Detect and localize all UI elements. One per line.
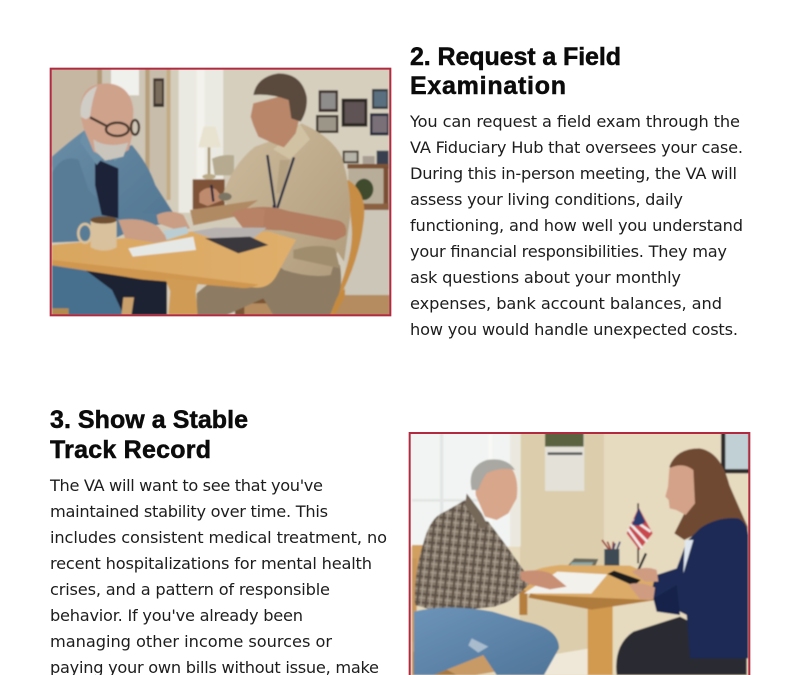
checkbook and papers [128,237,196,257]
chair [411,648,495,675]
tablet, pen and hands [607,571,641,586]
section 2: body text [409,112,743,339]
section 3: body text: includes consistent medical treatment, no [50,528,387,547]
section 2: body text: VA Fiduciary Hub that oversees your case. [410,138,743,157]
pen, clipboard, papers [211,185,213,202]
right man's trousers [196,264,342,314]
flag [627,503,653,563]
section 2: heading: 2. Request a Field [410,43,621,71]
table [52,232,296,288]
section 2: body text: functioning, and how well you understand [410,216,743,235]
section 3: heading: 3. Show a Stable [50,406,248,434]
section 3: body text: recent hospitalizations for mental health [50,554,372,573]
section 2: body text: your financial responsibilities. They may [410,242,727,261]
mug [78,224,92,243]
left man's head [80,83,133,160]
woman's blazer [652,518,748,658]
section 3: body text: The VA will want to see that you've [49,476,323,495]
section 3: body text: managing other income sources or [50,632,332,651]
section 3: body text [49,476,387,675]
section 2: body text: assess your living conditions, daily [410,190,683,209]
section 2: body text: expenses, bank account balances, and [410,294,722,313]
man's hand [521,570,567,589]
calculator [205,237,268,253]
section 2: body text: how you would handle unexpected costs. [410,320,738,339]
pencil cup [602,540,613,551]
woman's pants [616,617,747,675]
section 3: heading: Track Record [50,436,211,464]
section 3: body text: maintained stability over time. This [50,502,328,521]
right man's arm [248,207,346,240]
section 3: body text: behavior. If you've already been [50,606,303,625]
section 3: heading [50,406,248,464]
section 2: heading: Examination [410,72,566,100]
section 2: body text: You can request a field exam through the [409,112,740,131]
left man's legs [86,270,168,314]
left man's hands and forearm [118,219,168,243]
section 2: body text: During this in-person meeting, the VA will [410,164,737,183]
right man's head [251,93,299,147]
table [588,603,613,675]
section 2: body text: ask questions about your monthly [410,268,681,287]
papers [524,572,607,594]
section 2: heading [410,43,621,100]
section 3: body text: crises, and a pattern of responsible [50,580,330,599]
illustration: field examiner interviewing a veteran at a kitchen table [50,68,392,316]
left man's shirt [52,130,173,214]
chair of right man [329,180,364,315]
woman's hair back [669,448,748,540]
man's jeans [414,608,559,675]
right man's shirt [222,123,350,276]
illustration: veteran meeting a VA representative at a round table [408,432,750,675]
calculator [568,558,599,566]
woman's face [665,465,695,515]
man's shirt [415,500,532,610]
man's head [475,464,517,520]
